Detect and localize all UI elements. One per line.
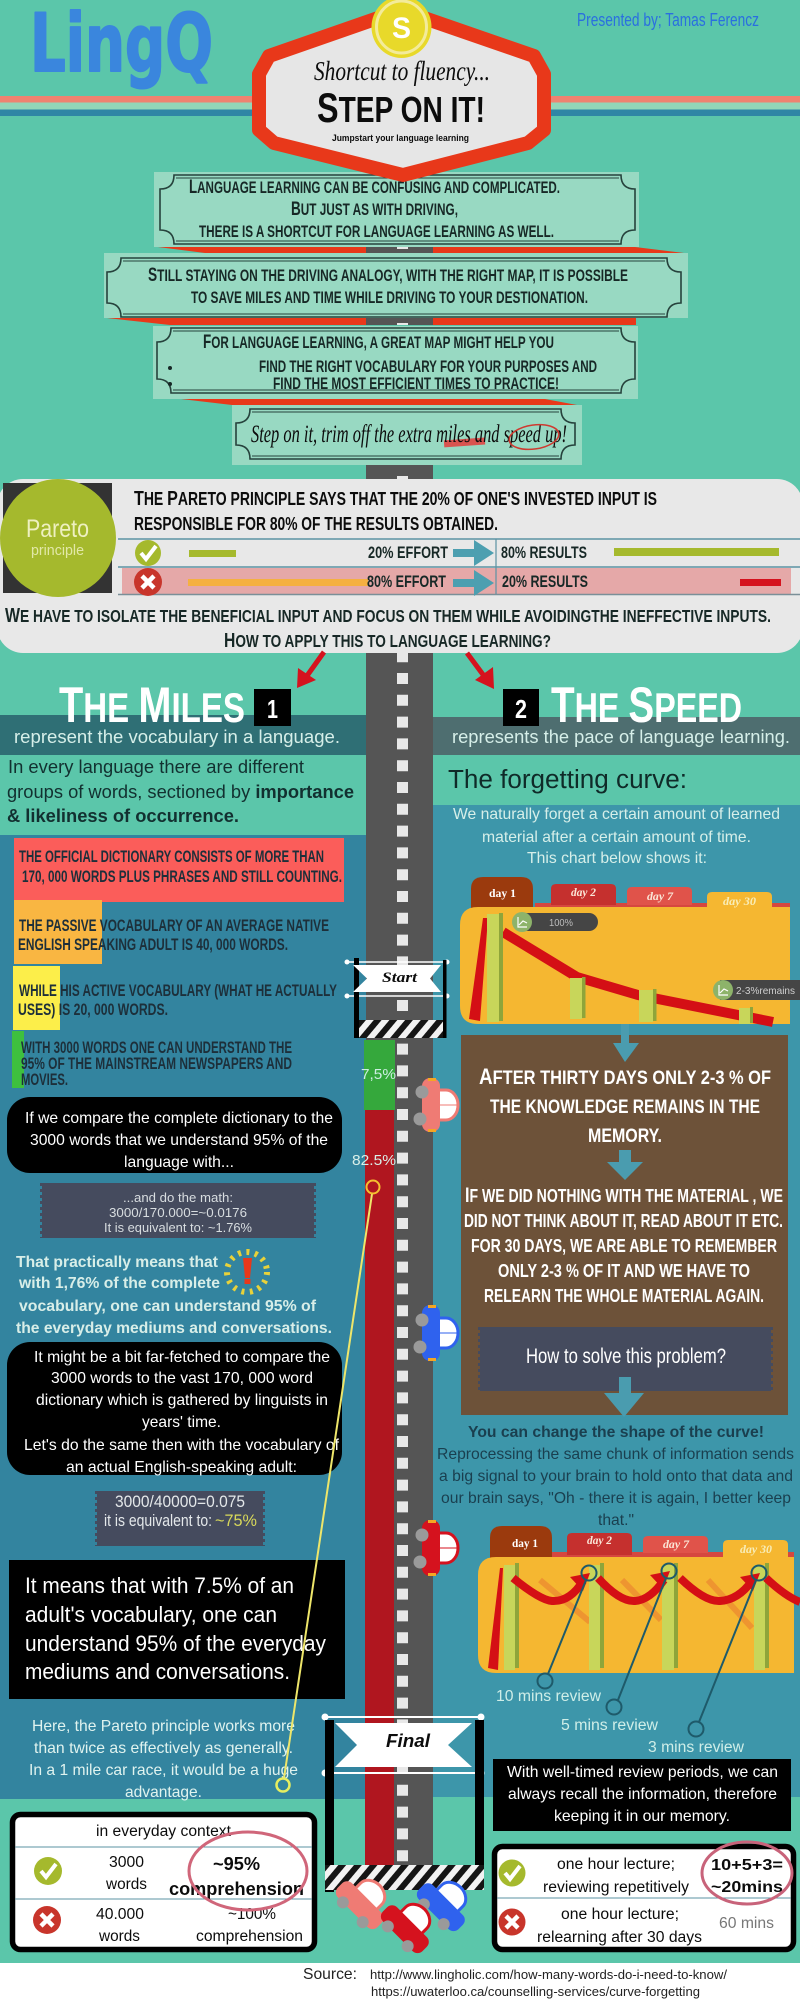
callout: far-fetched comparison: Let's do the same then with the vocabulary of xyxy=(24,1437,340,1454)
text: change the curve xyxy=(437,1424,794,1529)
callout: compare dictionary xyxy=(7,1097,342,1173)
chart: forgetting curve: day 30 xyxy=(723,894,756,908)
panel: intro sign 4: Step on it, trim off the extra miles and speed up! xyxy=(251,421,567,448)
text: change the curve: a big signal to your brain to hold onto that data and xyxy=(439,1468,793,1485)
pareto statement xyxy=(134,487,657,534)
chart: forgetting curve xyxy=(460,877,800,1024)
table: lecture review: one hour lecture; xyxy=(557,1856,675,1873)
table: everyday context: comprehension xyxy=(196,1928,303,1945)
text: practical meaning: the everyday mediums and conversations. xyxy=(16,1320,332,1337)
chart: reviewed curve: day 7 xyxy=(663,1537,690,1551)
text: word groups intro: & likeliness of occurrence. xyxy=(7,805,239,826)
car: pink crashed xyxy=(329,1866,399,1936)
label: 2-3% remains xyxy=(713,980,800,1000)
callout: well-timed review: With well-timed review periods, we can xyxy=(507,1764,778,1781)
panel: intro sign 3 xyxy=(153,326,638,399)
labels: review durations: 10 mins review xyxy=(496,1688,602,1705)
bar: active vocabulary xyxy=(13,966,337,1030)
road strip 3 xyxy=(181,399,577,405)
text: practical meaning xyxy=(16,1254,332,1337)
title sign xyxy=(259,0,544,175)
car: blue crashed xyxy=(410,1868,480,1938)
bar: official dictionary: THE OFFICIAL DICTIONARY CONSISTS OF MORE THAN xyxy=(19,848,324,866)
table: lecture review: one hour lecture; xyxy=(561,1906,679,1923)
bar: passive vocabulary: THE PASSIVE VOCABULARY OF AN AVERAGE NATIVE xyxy=(19,917,329,935)
callout: how to solve: How to solve this problem? xyxy=(526,1345,726,1368)
text: practical meaning: vocabulary, one can understand 95% of xyxy=(19,1298,317,1315)
text: change the curve: that." xyxy=(598,1512,634,1529)
source links: https://uwaterloo.ca/counselling-services/curve-forgetting xyxy=(371,1985,700,1999)
panel: intro sign 1: THERE IS A SHORTCUT FOR LANGUAGE LEARNING AS WELL. xyxy=(199,222,554,241)
row: ineffective input: 80% EFFORT xyxy=(367,573,446,591)
start sign xyxy=(344,958,450,1038)
panel: intro sign 3: FIND THE MOST EFFICIENT TIMES TO PRACTICE! xyxy=(273,374,559,393)
callout: far-fetched comparison xyxy=(7,1342,342,1476)
road: full lane xyxy=(366,465,433,1865)
text: after thirty days xyxy=(479,1064,771,1147)
chart: share of vocabulary on road: 82.5% xyxy=(352,1152,396,1169)
callout: 7.5 percent: mediums and conversations. xyxy=(25,1659,290,1684)
subtitle: Shortcut to fluency... xyxy=(314,56,490,86)
table: everyday context: in everyday context xyxy=(96,1823,232,1840)
chart: forgetting curve: day 7 xyxy=(647,889,674,903)
table: everyday context: 3000 xyxy=(109,1854,144,1871)
text: forgetting intro xyxy=(453,806,780,867)
bar: passive vocabulary xyxy=(14,900,329,964)
text: forgetting intro: We naturally forget a certain amount of learned xyxy=(453,806,780,823)
labels: review durations: 3 mins review xyxy=(648,1739,745,1756)
bar: active vocabulary: WHILE HIS ACTIVE VOCABULARY (WHAT HE ACTUALLY xyxy=(19,982,337,1000)
arrow: to miles xyxy=(297,652,324,688)
car: red crashed xyxy=(374,1890,444,1960)
table: lecture review: relearning after 30 days xyxy=(537,1929,702,1946)
road strip 1 xyxy=(158,247,684,253)
panel: Pareto principle xyxy=(0,479,800,653)
callout: compare dictionary: If we compare the complete dictionary to the xyxy=(25,1110,333,1127)
text: car race advantage: Here, the Pareto principle works more xyxy=(32,1718,295,1735)
bar: 3000 words: 95% OF THE MAINSTREAM NEWSPAPERS AND xyxy=(21,1054,292,1073)
callout: 7.5 percent xyxy=(9,1560,345,1699)
table: everyday context: ~100% xyxy=(228,1906,276,1923)
band: the speed: represents the pace of language learning. xyxy=(452,726,790,747)
math box: adult ratio: 3000/40000=0.075 xyxy=(115,1492,245,1511)
source links: http://www.lingholic.com/how-many-words-do-i-need-to-know/ xyxy=(370,1968,728,1982)
panel: intro sign 1 xyxy=(154,172,639,247)
panel: intro sign 2 xyxy=(104,253,688,318)
bar: active vocabulary: USES) IS 20, 000 WORDS. xyxy=(18,1001,168,1019)
table: lecture review: reviewing repetitively xyxy=(543,1879,689,1896)
chart: reviewed curve: day 1 xyxy=(512,1536,538,1550)
band: the miles: represent the vocabulary in a language. xyxy=(14,726,340,747)
table: lecture review: ~20mins xyxy=(711,1879,783,1896)
pareto statement: THE PARETO PRINCIPLE SAYS THAT THE 20% OF ONE'S INVESTED INPUT IS xyxy=(134,487,657,510)
label: 2-3% remains: 2-3%remains xyxy=(736,985,795,997)
text: word groups intro: In every language there are different xyxy=(8,756,304,777)
bar: 3000 words: WITH 3000 WORDS ONE CAN UNDERSTAND THE xyxy=(21,1038,292,1057)
final sign: Final xyxy=(386,1731,431,1751)
row: effective input xyxy=(118,539,800,567)
callout: compare dictionary: 3000 words that we understand 95% of the xyxy=(30,1132,328,1149)
callout: compare dictionary: language with... xyxy=(124,1154,234,1171)
table: everyday context xyxy=(12,1814,314,1950)
text: car race advantage: In a 1 mile car race, it would be a huge xyxy=(29,1762,298,1779)
text: practical meaning: with 1,76% of the complete xyxy=(18,1275,220,1292)
math box: adult ratio: ~75% xyxy=(215,1511,257,1530)
callout: how to solve xyxy=(480,1327,771,1391)
pareto conclusion xyxy=(5,605,771,652)
pareto badge: principle xyxy=(31,542,84,559)
arrow: to speed xyxy=(467,653,494,689)
chart: forgetting curve: day 1 xyxy=(489,886,516,900)
table: everyday context: ~95% xyxy=(213,1853,260,1874)
panel: intro sign 1: BUT JUST AS WITH DRIVING, xyxy=(291,198,458,220)
arrow: result to explanation xyxy=(607,1150,643,1180)
car: blue on road xyxy=(414,1305,458,1361)
row: effective input: 20% EFFORT xyxy=(368,544,448,562)
table: everyday context: comprehension xyxy=(169,1878,304,1899)
coin icon: S xyxy=(392,12,411,45)
row: ineffective input xyxy=(118,539,800,596)
main title: STEP ON IT! xyxy=(317,85,485,131)
band: the speed xyxy=(433,717,800,755)
text: forgetting intro: material after a certain amount of time. xyxy=(482,829,751,846)
icon: check xyxy=(34,1857,62,1885)
pareto conclusion: HOW TO APPLY THIS TO LANGUAGE LEARNING? xyxy=(224,630,551,652)
pareto statement: RESPONSIBLE FOR 80% OF THE RESULTS OBTAINED. xyxy=(134,514,498,534)
table: everyday context: words xyxy=(105,1876,147,1893)
heading: the forgetting curve: The forgetting curve: xyxy=(448,766,687,794)
bar: passive vocabulary: ENGLISH SPEAKING ADULT IS 40, 000 WORDS. xyxy=(18,936,288,954)
panel: intro sign 4 xyxy=(232,405,582,465)
road strip 2 xyxy=(107,318,636,325)
arrow: chart to result xyxy=(613,1024,639,1062)
source links xyxy=(303,1966,728,1999)
icon: check xyxy=(498,1860,526,1886)
heading: the speed: 2 xyxy=(515,694,527,724)
callout: well-timed review: always recall the information, therefore xyxy=(508,1786,777,1803)
car: red on road xyxy=(414,1520,458,1576)
callout: far-fetched comparison: It might be a bit far-fetched to compare the xyxy=(34,1349,330,1366)
table: everyday context: words xyxy=(98,1928,140,1945)
callout: 7.5 percent: understand 95% of the everyday xyxy=(25,1631,327,1656)
text: if we did nothing xyxy=(464,1183,783,1306)
chart: reviewed curve: day 30 xyxy=(740,1542,772,1556)
text: change the curve: our brain says, "Oh - there it is again, I better keep xyxy=(441,1490,791,1507)
chart: share of vocabulary on road xyxy=(352,1040,396,1865)
car: pink on road xyxy=(414,1078,458,1132)
pareto badge xyxy=(0,479,116,597)
bar: official dictionary xyxy=(14,838,344,902)
panel: intro sign 3: FOR LANGUAGE LEARNING, A GREAT MAP MIGHT HELP YOU xyxy=(203,331,554,353)
table: everyday context: 40.000 xyxy=(96,1906,144,1923)
heading: the miles: THE MILES xyxy=(59,676,245,733)
arrow: problem to solution xyxy=(604,1377,644,1417)
text: car race advantage: advantage. xyxy=(125,1784,202,1801)
text: change the curve: You can change the shape of the curve! xyxy=(468,1424,764,1441)
text: car race advantage xyxy=(29,1718,298,1801)
math box: dictionary ratio: 3000/170.000=~0.0176 xyxy=(109,1205,247,1220)
table: lecture review xyxy=(494,1842,794,1950)
panel: intro sign 1: LANGUAGE LEARNING CAN BE CONFUSING AND COMPLICATED. xyxy=(189,176,560,198)
sign shape xyxy=(259,10,544,175)
panel: intro sign 3: FIND THE RIGHT VOCABULARY FOR YOUR PURPOSES AND xyxy=(259,357,597,376)
label: 100% xyxy=(512,912,598,932)
label: 100%: 100% xyxy=(549,918,573,929)
text: word groups intro xyxy=(7,756,354,826)
bar: 3000 words xyxy=(12,1031,292,1089)
leader line: 82.5 percent to conclusion xyxy=(276,1180,380,1792)
coin icon xyxy=(372,0,432,58)
panel: intro sign 2: TO SAVE MILES AND TIME WHILE DRIVING TO YOUR DESTIONATION. xyxy=(191,288,588,307)
callout: 7.5 percent: It means that with 7.5% of an xyxy=(25,1573,294,1598)
callout: well-timed review xyxy=(493,1759,791,1831)
table: lecture review: 10+5+3= xyxy=(711,1857,783,1874)
math box: dictionary ratio: ...and do the math: xyxy=(123,1190,233,1205)
text: change the curve: Reprocessing the same chunk of information sends xyxy=(437,1446,794,1463)
math box: adult ratio xyxy=(97,1491,263,1546)
chart: share of vocabulary on road: 7,5% xyxy=(361,1066,396,1083)
icon: exclamation mark xyxy=(227,1252,267,1292)
math box: dictionary ratio xyxy=(42,1183,314,1238)
band: the miles xyxy=(0,715,366,755)
text: car race advantage: than twice as effectively as generally. xyxy=(34,1740,293,1757)
text: after thirty days: MEMORY. xyxy=(588,1126,662,1147)
chart: reviewed curve xyxy=(478,1526,800,1736)
callout: 7.5 percent: adult's vocabulary, one can xyxy=(25,1602,277,1627)
row: ineffective input: 20% RESULTS xyxy=(502,573,588,591)
heading: the miles: 1 xyxy=(267,694,278,724)
callout: well-timed review: keeping it in our memory. xyxy=(554,1808,730,1825)
source links: Source: xyxy=(303,1966,357,1983)
math box: dictionary ratio: It is equivalent to: ~1.76% xyxy=(104,1220,252,1235)
row: effective input: 80% RESULTS xyxy=(501,544,587,562)
table: lecture review: 60 mins xyxy=(719,1915,774,1932)
pareto badge: Pareto xyxy=(26,515,89,543)
tagline: Jumpstart your language learning xyxy=(332,133,469,143)
panel: thirty days result xyxy=(461,1024,788,1417)
labels: review durations: 5 mins review xyxy=(561,1717,659,1734)
start sign: Start xyxy=(382,970,418,986)
callout: far-fetched comparison: 3000 words to the vast 170, 000 word xyxy=(51,1370,313,1387)
final sign xyxy=(322,1714,484,1892)
chart: reviewed curve: day 2 xyxy=(587,1533,612,1547)
chart: forgetting curve: day 2 xyxy=(571,885,596,899)
review markers xyxy=(538,1564,766,1736)
bar: 3000 words: MOVIES. xyxy=(21,1070,68,1089)
text: forgetting intro: This chart below shows it: xyxy=(527,850,707,867)
callout: far-fetched comparison: an actual English-speaking adult: xyxy=(66,1459,297,1476)
callout: far-fetched comparison: dictionary which is gathered by linguists in xyxy=(36,1392,328,1409)
icon: cross xyxy=(33,1906,61,1934)
text: practical meaning: That practically means that xyxy=(16,1254,219,1271)
bar: official dictionary: 170, 000 WORDS PLUS PHRASES AND STILL COUNTING. xyxy=(22,868,342,886)
callout: far-fetched comparison: years' time. xyxy=(142,1414,221,1431)
labels: review durations xyxy=(496,1688,745,1756)
math box: adult ratio: it is equivalent to: xyxy=(104,1511,212,1530)
text: word groups intro: groups of words, sectioned by importance xyxy=(7,781,354,802)
icon: cross xyxy=(498,1908,526,1936)
heading: the speed: THE SPEED xyxy=(551,676,742,733)
